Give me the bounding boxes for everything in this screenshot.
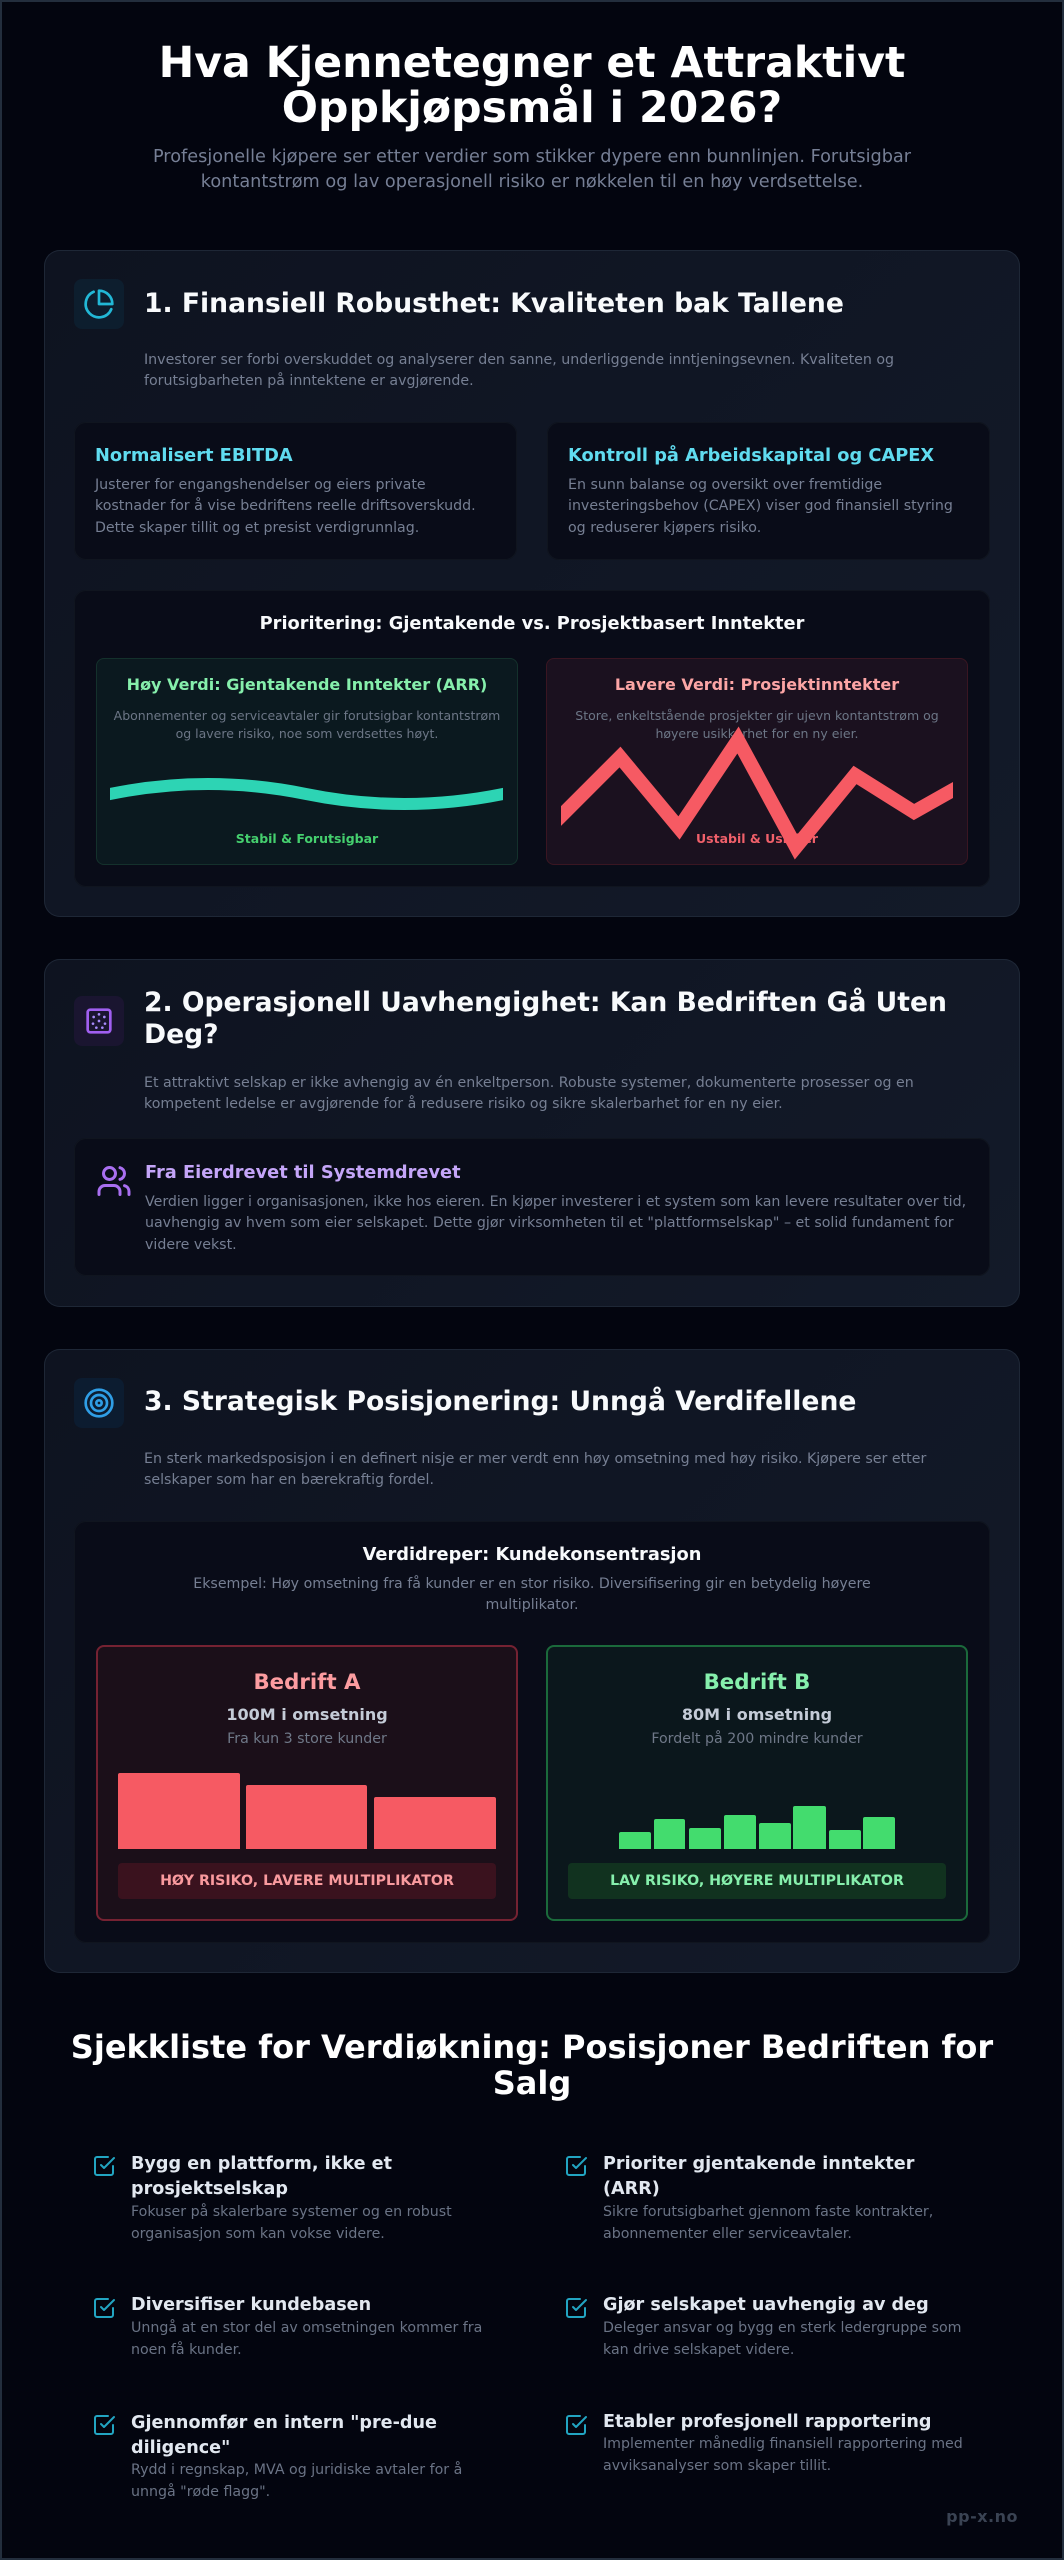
title: Hva Kjennetegner et Attraktivt	[159, 38, 905, 88]
item text: Implementer månedlig finansiell rapportering med	[603, 2436, 963, 2452]
item text	[603, 2435, 963, 2474]
section 2 heading: Deg?	[144, 1019, 219, 1050]
item text	[131, 2461, 462, 2500]
item text: unngå "røde flagg".	[131, 2484, 270, 2500]
item heading: Prioriter gjentakende inntekter	[603, 2154, 914, 2174]
owner-driven text: Verdien ligger i organisasjonen, ikke hos eieren. En kjøper investerer i et system som kan levere resultater over tid,	[145, 1194, 966, 1210]
checklist item: platform	[94, 2154, 452, 2242]
company A customers: Fra kun 3 store kunder	[227, 1731, 387, 1747]
icon: checkbox	[94, 2415, 115, 2435]
checklist item: independence	[566, 2295, 961, 2358]
checklist item: due diligence	[94, 2413, 462, 2500]
item text: noen få kunder.	[131, 2342, 242, 2358]
CAPEX text: En sunn balanse og oversikt over fremtidige	[568, 477, 882, 493]
subtitle: Profesjonelle kjøpere ser etter verdier som stikker dypere enn bunnlinjen. Forutsigbar	[153, 147, 911, 167]
section 2 heading: 2. Operasjonell Uavhengighet: Kan Bedriften Gå Uten	[144, 987, 947, 1018]
company B name: Bedrift B	[704, 1670, 810, 1695]
company A name: Bedrift A	[253, 1670, 361, 1695]
company A revenue: 100M i omsetning	[226, 1705, 388, 1724]
item text	[131, 2203, 452, 2242]
company B revenue: 80M i omsetning	[682, 1705, 832, 1724]
section 3 heading: 3. Strategisk Posisjonering: Unngå Verdifellene	[144, 1386, 856, 1417]
panel: revenue prioritisation	[74, 590, 990, 887]
CAPEX text: investeringsbehov (CAPEX) viser god finansiell styring	[568, 498, 953, 514]
panel: section 2 operational independence	[44, 959, 1020, 1307]
concentration text: multiplikator.	[485, 1597, 579, 1613]
panel: owner-driven to system-driven	[74, 1138, 990, 1276]
item heading	[131, 2154, 392, 2199]
company B customers: Fordelt på 200 mindre kunder	[651, 1731, 863, 1747]
section 3 intro text	[144, 1451, 926, 1488]
recurring caption: Stabil & Forutsigbar	[236, 831, 378, 846]
prioritisation heading: Prioritering: Gjentakende vs. Prosjektbasert Inntekter	[260, 613, 804, 634]
card: company B	[546, 1645, 968, 1921]
item text: avviksanalyser som skaper tillit.	[603, 2458, 831, 2474]
item text: kan drive selskapet videre.	[603, 2342, 794, 2358]
EBITDA heading: Normalisert EBITDA	[95, 445, 293, 466]
subtitle: kontantstrøm og lav operasjonell risiko er nøkkelen til en høy verdsettelse.	[201, 172, 863, 192]
icon: checkbox	[566, 2156, 587, 2176]
item text: abonnementer eller serviceavtaler.	[603, 2226, 852, 2242]
item text	[131, 2319, 482, 2358]
item heading: Gjennomfør en intern "pre-due	[131, 2413, 437, 2433]
section 3 intro text: En sterk markedsposisjon i en definert nisje er mer verdt enn høy omsetning med høy risiko. Kjøpere ser etter	[144, 1451, 926, 1467]
item text	[603, 2320, 961, 2358]
item text: Unngå at en stor del av omsetningen kommer fra	[131, 2320, 482, 2336]
section 1 intro text: Investorer ser forbi overskuddet og analyserer den sanne, underliggende inntjeningsevnen. Kvaliteten og	[144, 352, 894, 368]
bar chart: company B	[619, 1806, 895, 1849]
owner-driven text: videre vekst.	[145, 1237, 237, 1253]
CAPEX heading: Kontroll på Arbeidskapital og CAPEX	[568, 445, 934, 466]
card: project revenue	[546, 658, 968, 865]
chart: volatile zigzag	[561, 726, 953, 860]
project caption: Ustabil & Usikker	[696, 831, 818, 846]
concentration text: Eksempel: Høy omsetning fra få kunder er en stor risiko. Diversifisering gir en betydelig høyere	[193, 1576, 871, 1592]
owner-driven text	[145, 1194, 966, 1253]
item text: Fokuser på skalerbare systemer og en robust	[131, 2204, 452, 2220]
section 1 intro text: forutsigbarheten på inntektene er avgjørende.	[144, 373, 474, 389]
icon: checkbox	[94, 2298, 115, 2318]
section 2 intro text: kompetent ledelse er avgjørende for å redusere risiko og sikre skalerbarhet for en ny eier.	[144, 1096, 783, 1112]
owner-driven heading: Fra Eierdrevet til Systemdrevet	[145, 1162, 461, 1183]
recurring text: og lavere risiko, noe som verdsettes høyt.	[176, 726, 438, 741]
company B verdict: LAV RISIKO, HØYERE MULTIPLIKATOR	[610, 1873, 904, 1889]
item heading: prosjektselskap	[131, 2179, 288, 2199]
item heading	[131, 2413, 437, 2458]
EBITDA text	[94, 477, 476, 536]
title	[159, 38, 905, 133]
checklist item: recurring revenue	[566, 2154, 933, 2242]
item heading: Diversifiser kundebasen	[131, 2295, 371, 2315]
CAPEX text	[568, 477, 953, 536]
item heading: Gjør selskapet uavhengig av deg	[603, 2295, 929, 2315]
section 2 intro text	[144, 1075, 914, 1112]
panel: normalised EBITDA	[74, 422, 517, 560]
checklist heading: Salg	[493, 2064, 571, 2102]
project heading: Lavere Verdi: Prosjektinntekter	[615, 675, 899, 694]
icon: pie chart	[74, 279, 124, 329]
bar chart: company A	[118, 1773, 496, 1849]
company B verdict	[568, 1863, 946, 1899]
project text: Store, enkeltstående prosjekter gir ujevn kontantstrøm og	[575, 708, 939, 723]
card: recurring revenue	[96, 658, 518, 865]
panel: customer concentration	[74, 1521, 990, 1943]
icon: users	[98, 1166, 130, 1196]
item heading: Bygg en plattform, ikke et	[131, 2154, 392, 2174]
section 2 intro text: Et attraktivt selskap er ikke avhengig av én enkeltperson. Robuste systemer, dokumenterte prosesser og en	[144, 1075, 914, 1091]
icon: checkbox	[94, 2156, 115, 2176]
item heading: Etabler profesjonell rapportering	[603, 2412, 932, 2432]
footer brand: pp-x.no	[946, 2507, 1018, 2526]
EBITDA text: Justerer for engangshendelser og eiers private	[95, 477, 426, 493]
EBITDA text: Dette skaper tillit og et presist verdigrunnlag.	[95, 520, 419, 536]
panel: section 3 strategic positioning	[44, 1349, 1020, 1973]
recurring text	[114, 708, 500, 741]
section 1 heading: 1. Finansiell Robusthet: Kvaliteten bak Tallene	[144, 288, 844, 319]
subtitle	[153, 147, 911, 192]
EBITDA text: kostnader for å vise bedriftens reelle driftsoverskudd.	[95, 498, 476, 514]
checklist heading	[71, 2028, 994, 2102]
recurring text: Abonnementer og serviceavtaler gir forutsigbar kontantstrøm	[114, 708, 500, 723]
owner-driven text: uavhengig av hvem som eier selskapet. Dette gjør virksomheten til et "plattformselskap" – et solid fundament for	[145, 1215, 954, 1231]
panel: section 1 financial robustness	[44, 250, 1020, 917]
item text	[603, 2204, 933, 2242]
section 1 intro text	[144, 352, 894, 389]
CAPEX text: og reduserer kjøpers risiko.	[568, 520, 761, 536]
project text	[575, 708, 939, 741]
panel: working capital and CAPEX	[547, 422, 990, 560]
icon: target	[74, 1378, 124, 1428]
section 3 intro text: selskaper som har en bærekraftig fordel.	[144, 1472, 434, 1488]
item heading: (ARR)	[603, 2179, 660, 2199]
card: company A	[96, 1645, 518, 1921]
recurring heading: Høy Verdi: Gjentakende Inntekter (ARR)	[127, 675, 487, 694]
item text: Deleger ansvar og bygg en sterk ledergruppe som	[603, 2320, 961, 2336]
item text: Sikre forutsigbarhet gjennom faste kontrakter,	[603, 2204, 933, 2220]
checklist item: diversify	[94, 2295, 482, 2358]
icon: checkbox	[566, 2298, 587, 2318]
item heading	[603, 2154, 914, 2199]
chart: smooth wave	[110, 778, 503, 810]
project text: høyere usikkerhet for en ny eier.	[655, 726, 859, 741]
icon: checkbox	[566, 2415, 587, 2435]
concentration heading: Verdidreper: Kundekonsentrasjon	[363, 1544, 701, 1565]
checklist heading: Sjekkliste for Verdiøkning: Posisjoner Bedriften for	[71, 2028, 993, 2066]
icon: dotted square	[74, 996, 124, 1046]
checklist item: reporting	[566, 2412, 963, 2474]
concentration text	[193, 1575, 871, 1613]
item text: organisasjon som kan vokse videre.	[131, 2226, 385, 2242]
item text: Rydd i regnskap, MVA og juridiske avtaler for å	[131, 2462, 462, 2478]
section 2 heading	[144, 987, 947, 1050]
item heading: diligence"	[131, 2438, 230, 2458]
company A verdict: HØY RISIKO, LAVERE MULTIPLIKATOR	[160, 1873, 454, 1889]
title: Oppkjøpsmål i 2026?	[282, 83, 782, 133]
company A verdict	[118, 1863, 496, 1899]
